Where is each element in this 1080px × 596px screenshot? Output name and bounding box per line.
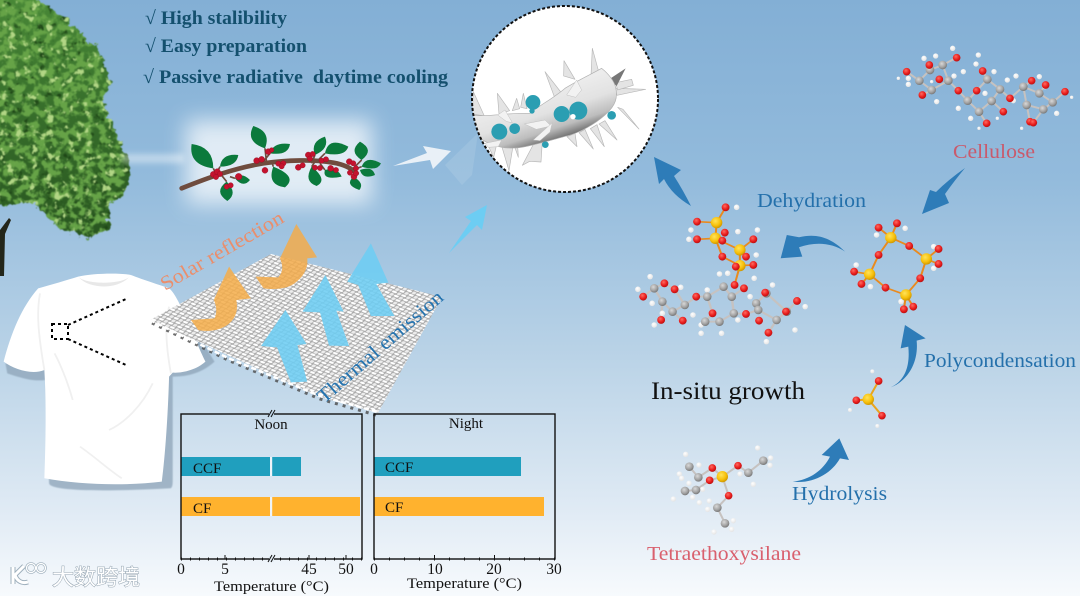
heading: benefits list: √ Easy preparation	[145, 36, 307, 57]
chart: night temperature: 10	[427, 561, 443, 578]
arrow: thermal emission 2	[303, 275, 349, 346]
particles	[491, 95, 616, 148]
icon: berry branch	[182, 126, 381, 201]
watermark logo	[13, 564, 140, 590]
arrow: solar reflection left	[191, 267, 251, 331]
arrow: white reflection arrow	[393, 146, 451, 169]
arrow: thermal emission 1	[261, 310, 307, 382]
arrow: hydrolysis	[793, 438, 849, 482]
chart: noon temperature: 45	[301, 561, 317, 578]
label: Polycondensation: Polycondensation	[924, 350, 1076, 372]
night bars	[374, 457, 544, 516]
chart: noon temperature	[177, 410, 362, 595]
label: Hydrolysis: Hydrolysis	[792, 483, 887, 505]
heading: benefits list	[143, 8, 449, 88]
label: Dehydration: Dehydration	[757, 190, 866, 212]
fabric weave	[150, 254, 442, 415]
icon: shirt magnifier dashes	[52, 299, 126, 365]
molecule: silica on cellulose	[635, 203, 808, 344]
chart: noon temperature: 5	[221, 561, 229, 578]
arrow: solar reflection right	[256, 224, 317, 289]
chart: night temperature: 0	[370, 561, 378, 578]
heading: benefits list: √ Passive radiative daytime cooling	[143, 67, 449, 88]
arrow: thermal emission 3	[347, 243, 395, 316]
molecule: silica ring	[850, 219, 942, 313]
chart: noon temperature: CCF	[193, 461, 221, 477]
chart: noon temperature: 50	[338, 561, 354, 578]
chart: noon temperature: Noon	[254, 417, 288, 433]
chart: night temperature: Temperature (°C)	[407, 576, 522, 592]
arrow: dehydration	[781, 235, 845, 258]
noon bars	[181, 457, 360, 516]
heading: benefits list: √ High stalibility	[145, 8, 288, 29]
chart: night temperature: 20	[486, 561, 502, 578]
spines behind the fiber	[472, 48, 646, 171]
magnified fiber circle	[471, 6, 658, 192]
arrow: to fiber circle	[654, 157, 691, 206]
chart: night temperature	[370, 414, 562, 592]
watermark logo: 大数跨境	[52, 565, 140, 590]
label: Thermal emission: Thermal emission	[313, 286, 448, 408]
arrow: cellulose to silica ring	[922, 168, 965, 214]
arrow: thermal emission to fiber	[449, 205, 487, 253]
faint beam	[445, 133, 478, 185]
chart: night temperature: Night	[449, 416, 484, 432]
molecule: cellulose	[897, 46, 1073, 130]
heading: In-situ growth: In-situ growth	[651, 378, 806, 405]
plant glow	[122, 120, 372, 204]
molecule: silicic acid	[848, 369, 886, 428]
chart: night temperature: CF	[385, 500, 403, 516]
chart: noon temperature: Temperature (°C)	[214, 579, 329, 595]
label: Tetraethoxysilane: Tetraethoxysilane	[647, 543, 801, 565]
molecule: tetraethoxysilane	[671, 445, 773, 535]
chart: night temperature: 30	[546, 561, 562, 578]
icon: tree	[0, 0, 130, 276]
icon: t-shirt	[4, 274, 215, 490]
chart: noon temperature: CF	[193, 501, 211, 517]
chart: night temperature: CCF	[385, 460, 413, 476]
label: Cellulose: Cellulose	[953, 141, 1035, 163]
arrow: polycondensation	[891, 325, 926, 387]
fiber body	[471, 68, 616, 148]
spines on the fiber	[485, 80, 582, 147]
chart: noon temperature: 0	[177, 561, 185, 578]
label: Solar reflection: Solar reflection	[156, 207, 288, 295]
